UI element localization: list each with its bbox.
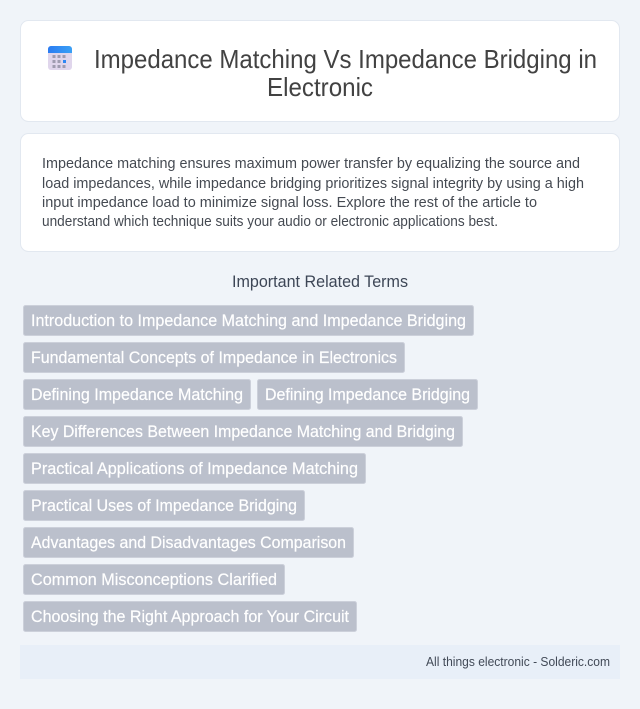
tag: applications of matching	[24, 454, 366, 484]
panel: description	[20, 134, 620, 252]
heading: important related terms: Important Related Terms	[232, 273, 408, 291]
tag: applications of matching: Practical Applications of Impedance Matching	[31, 459, 358, 478]
tag list	[24, 306, 478, 632]
footer: All things electronic - Solderic.com	[426, 655, 610, 669]
tag: fundamental concepts	[24, 342, 404, 372]
tag: defining bridging: Defining Impedance Bridging	[265, 385, 470, 404]
tag: key differences	[24, 416, 462, 446]
tag: uses of bridging	[24, 490, 304, 520]
tag: choosing approach: Choosing the Right Approach for Your Circuit	[31, 607, 349, 626]
title: Impedance Matching Vs Impedance Bridging in	[94, 44, 597, 74]
panel: description: input impedance load to minimize signal loss. Explore the rest of the article to	[42, 194, 537, 211]
tag: defining matching	[24, 380, 250, 410]
tag: misconceptions	[24, 564, 284, 594]
panel: header card	[20, 20, 620, 122]
tag: fundamental concepts: Fundamental Concepts of Impedance in Electronics	[31, 348, 397, 367]
panel: description: Impedance matching ensures maximum power transfer by equalizing the source and	[42, 155, 580, 172]
icon: calendar	[48, 46, 72, 70]
tag: advantages comparison: Advantages and Disadvantages Comparison	[31, 533, 346, 552]
panel: description: load impedances, while impedance bridging prioritizes signal integrity by using a high	[42, 175, 584, 192]
tag: misconceptions: Common Misconceptions Clarified	[31, 570, 277, 589]
footer	[20, 645, 620, 679]
panel: description: understand which technique suits your audio or electronic applications best.	[42, 213, 498, 230]
tag: key differences: Key Differences Between Impedance Matching and Bridging	[31, 422, 455, 441]
title: Electronic	[267, 72, 373, 102]
tag: defining matching: Defining Impedance Matching	[31, 385, 243, 404]
tag: introduction: Introduction to Impedance Matching and Impedance Bridging	[31, 311, 466, 330]
title	[94, 44, 597, 102]
tag: uses of bridging: Practical Uses of Impedance Bridging	[31, 496, 297, 515]
tag: introduction	[24, 306, 474, 336]
tag: advantages comparison	[24, 528, 354, 558]
tag: defining bridging	[258, 380, 478, 410]
tag: choosing approach	[24, 602, 356, 632]
